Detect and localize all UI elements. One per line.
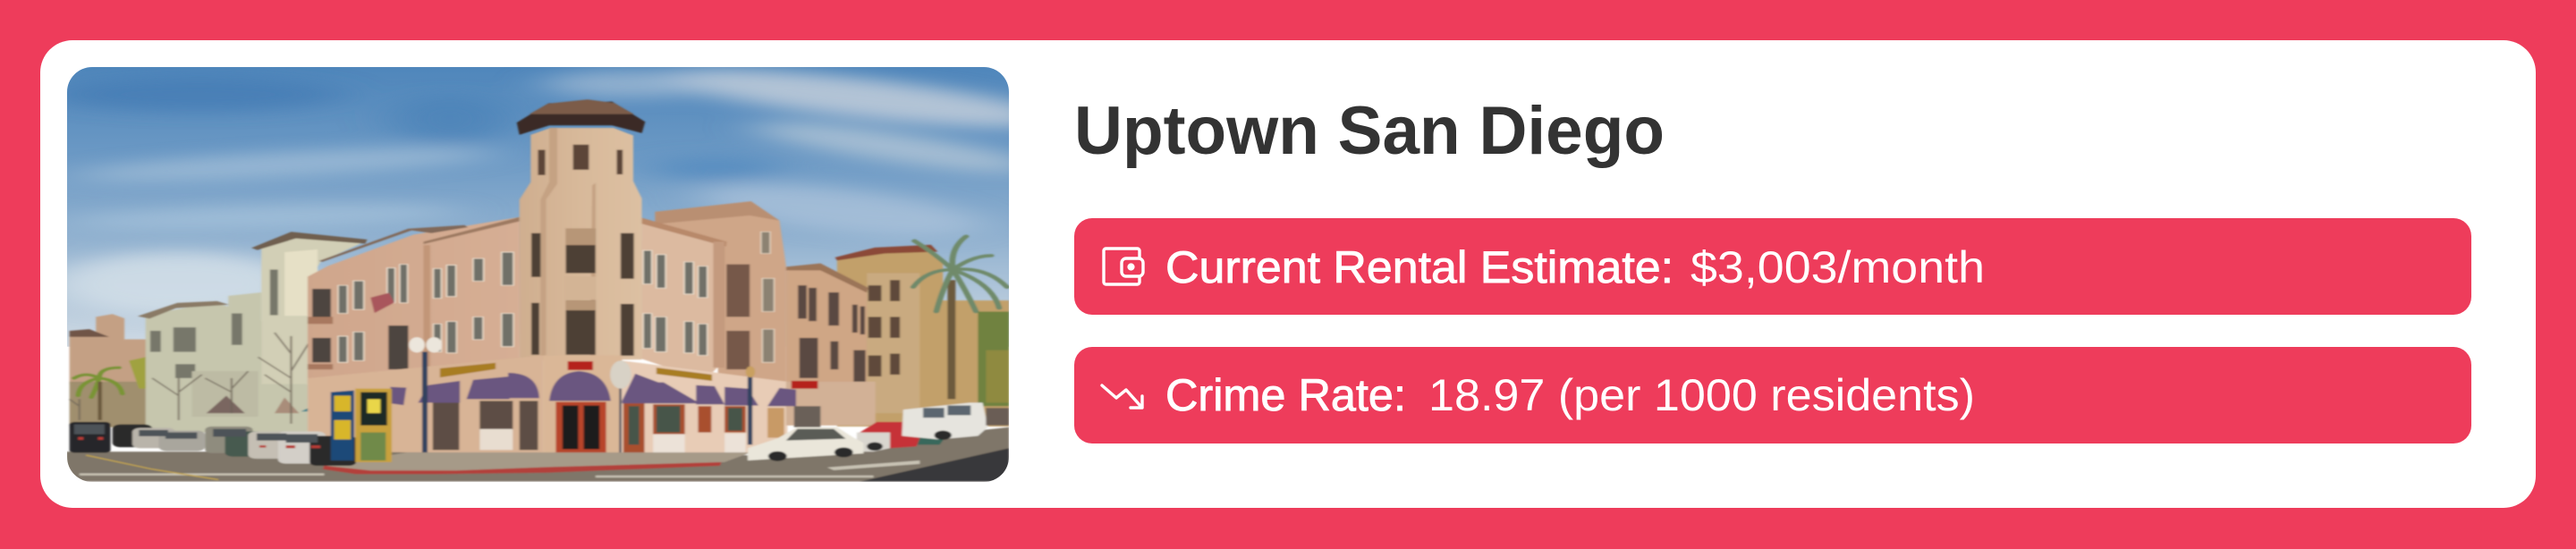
- far left pink building: [70, 314, 148, 427]
- far right yellow building: [835, 245, 1009, 427]
- stat bar: rental estimate: [1074, 218, 2471, 315]
- ground floor shopfronts: [308, 355, 876, 455]
- right wing of main building: [642, 218, 726, 380]
- stat bar: crime rate: [1074, 347, 2471, 443]
- parked cars left: [70, 422, 356, 466]
- buildings and street scene: [66, 99, 1009, 481]
- stepped tall block: [655, 201, 786, 441]
- road: [66, 427, 1009, 481]
- photo: street corner building in Uptown San Diego: [67, 67, 1009, 482]
- sky: [53, 57, 1062, 347]
- parked cars right: [748, 402, 1009, 461]
- value: crime rate: 18.97 (per 1000 residents): [1428, 370, 1975, 420]
- purple awnings: [390, 371, 796, 406]
- icon: wallet: [1104, 249, 1143, 284]
- icon: trending down arrow: [1102, 385, 1142, 408]
- value: rent: $3,003/month: [1690, 242, 1985, 292]
- right stepped building: [786, 263, 869, 426]
- palm trees: [74, 236, 1009, 420]
- bare trees: [70, 333, 311, 424]
- label: current rental estimate: Current Rental Estimate:: [1165, 242, 1674, 292]
- left cream buildings: [138, 232, 368, 433]
- street lamps: [409, 337, 755, 466]
- sidewalk sign: [331, 389, 392, 462]
- sidewalk and red curb: [80, 452, 919, 479]
- info panel: title and stat bars: [1074, 93, 2471, 443]
- corner tower: [520, 128, 642, 360]
- left wing of main building: [308, 217, 520, 399]
- title: Uptown San Diego: [1074, 93, 1665, 169]
- label: crime rate: Crime Rate:: [1165, 370, 1406, 420]
- tower roof: [517, 99, 645, 135]
- dark road shadow: [860, 448, 1009, 481]
